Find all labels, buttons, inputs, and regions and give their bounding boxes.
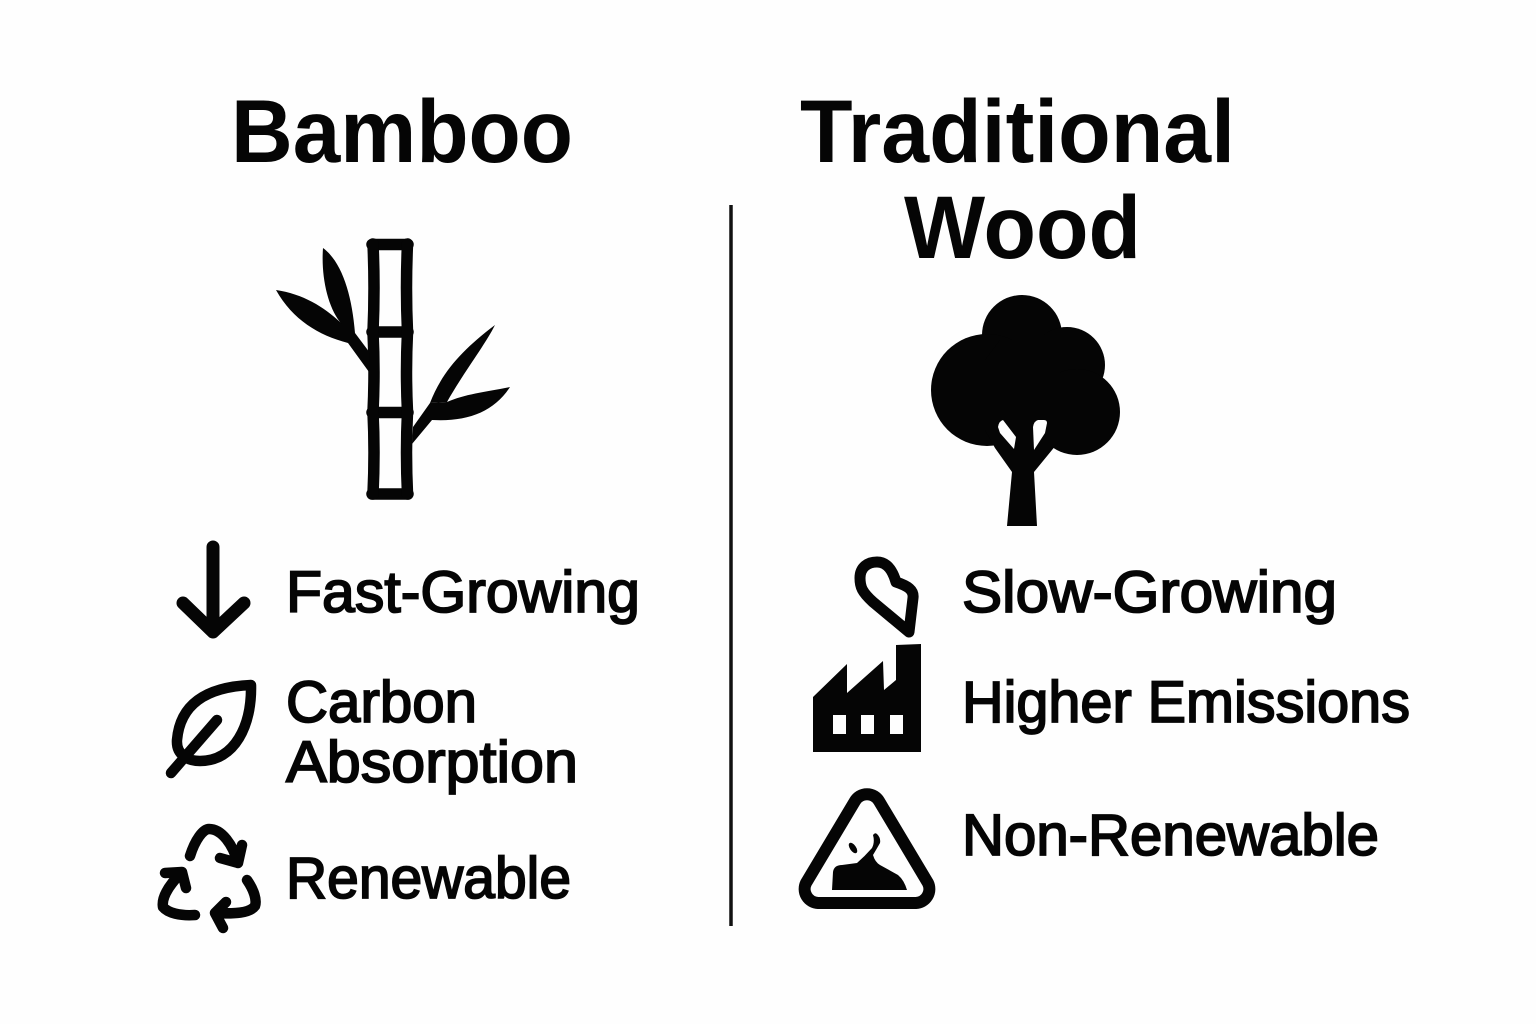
icon: warning triangle with oil spill xyxy=(805,794,929,903)
icon: down arrow xyxy=(183,547,244,632)
icon: tree xyxy=(931,295,1120,526)
label: Carbon Absorption xyxy=(286,670,578,795)
label: Slow-Growing: Slow-Growing xyxy=(962,560,1337,625)
heading: Traditional Wood: Traditional xyxy=(800,81,1235,181)
heading: Traditional Wood xyxy=(800,81,1235,277)
label: Carbon Absorption: Carbon xyxy=(286,670,477,735)
panel: traditional wood xyxy=(800,81,1410,903)
panel: bamboo xyxy=(163,81,640,928)
icon: smoke cloud xyxy=(860,562,913,632)
label: Higher Emissions: Higher Emissions xyxy=(962,670,1410,735)
heading: Bamboo: Bamboo xyxy=(231,81,573,181)
divider xyxy=(729,205,733,926)
icon: leaf xyxy=(171,685,251,773)
icon: bamboo stalk with leaves xyxy=(276,244,510,494)
label: Fast-Growing: Fast-Growing xyxy=(286,560,640,625)
heading: Traditional Wood: Wood xyxy=(904,177,1141,277)
label: Carbon Absorption: Absorption xyxy=(286,730,578,795)
label: Renewable: Renewable xyxy=(286,846,571,911)
icon: recycle arrows xyxy=(163,829,256,928)
label: Non-Renewable: Non-Renewable xyxy=(962,803,1379,868)
icon: factory xyxy=(813,644,921,752)
